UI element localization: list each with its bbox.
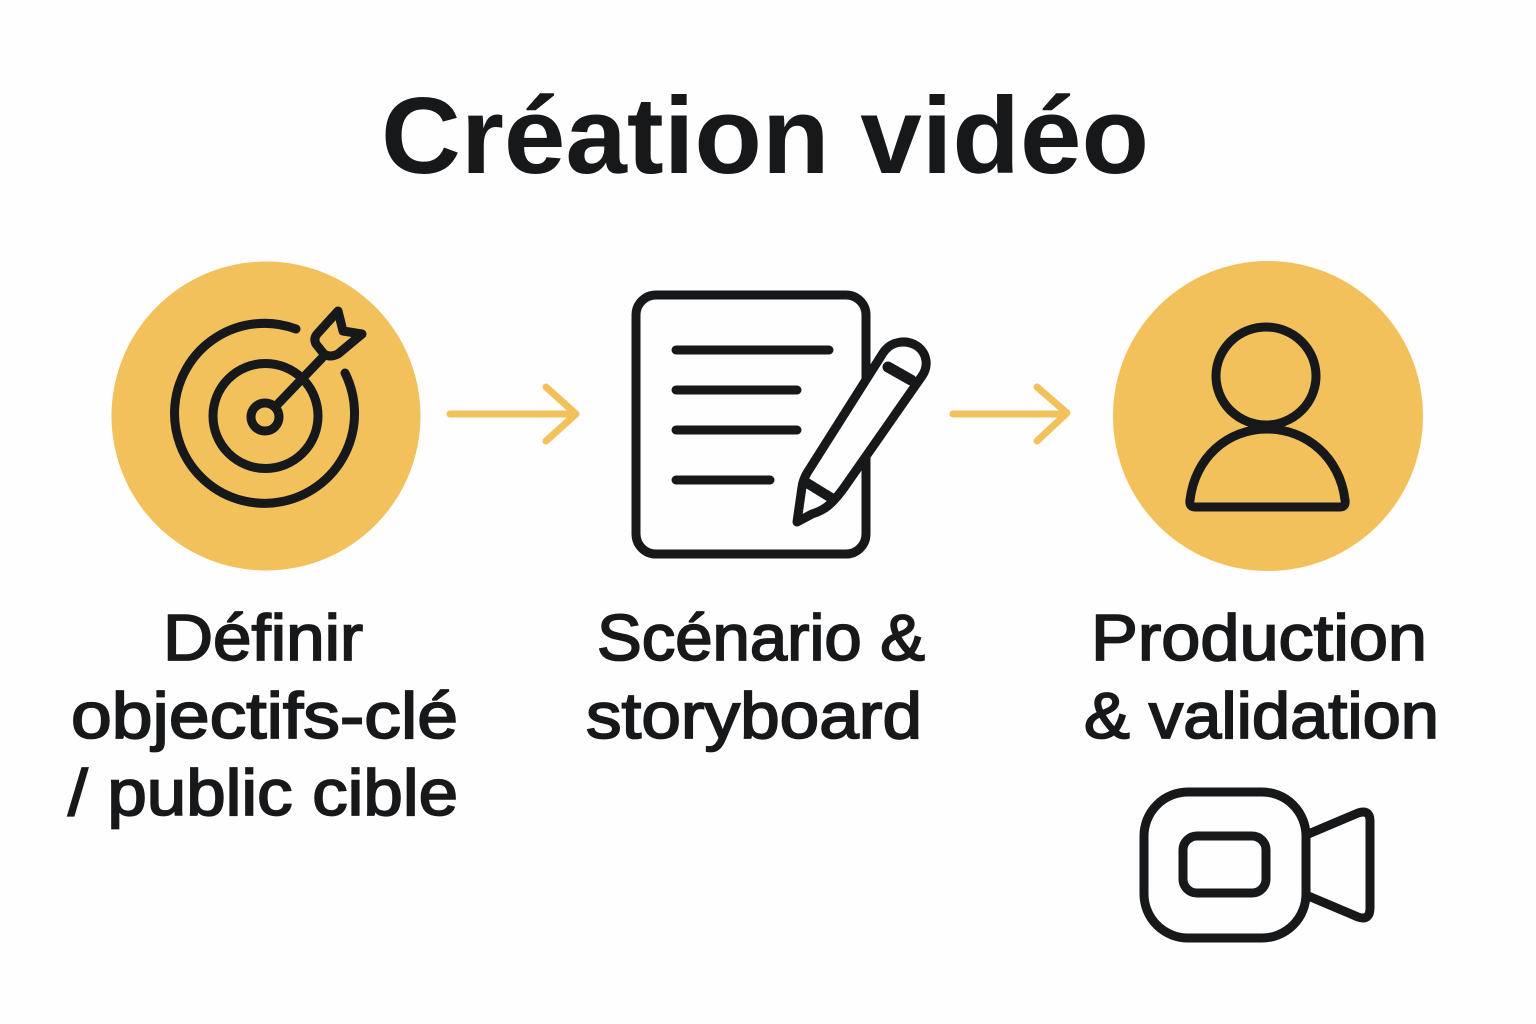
label: step 2 bbox=[586, 601, 925, 752]
label: step 3: & validation bbox=[1084, 679, 1439, 752]
icon: target with arrow bbox=[175, 311, 362, 503]
title: Création vidéo bbox=[381, 75, 1149, 197]
icon: person bbox=[1190, 327, 1345, 507]
step 1: define objectives bbox=[68, 262, 458, 829]
label: step 1: Définir bbox=[163, 601, 363, 674]
icon: document bbox=[636, 295, 866, 554]
label: step 2: storyboard bbox=[586, 679, 922, 752]
label: step 3: Production bbox=[1091, 601, 1427, 674]
arrow 2 bbox=[953, 387, 1067, 441]
icon circle: person bbox=[1113, 261, 1423, 571]
label: step 1: objectifs-clé bbox=[71, 679, 458, 752]
step 3: production and validation bbox=[1084, 261, 1439, 938]
arrow 1 bbox=[450, 387, 576, 441]
icon: pencil bbox=[797, 342, 926, 522]
step 2: script and storyboard bbox=[586, 295, 926, 752]
label: step 2: Scénario & bbox=[597, 601, 925, 674]
label: step 1 bbox=[68, 601, 458, 829]
icon circle: target bbox=[112, 262, 420, 570]
icon: video camera bbox=[1144, 792, 1370, 938]
label: step 1: / public cible bbox=[68, 756, 458, 829]
label: step 3 bbox=[1084, 601, 1439, 752]
